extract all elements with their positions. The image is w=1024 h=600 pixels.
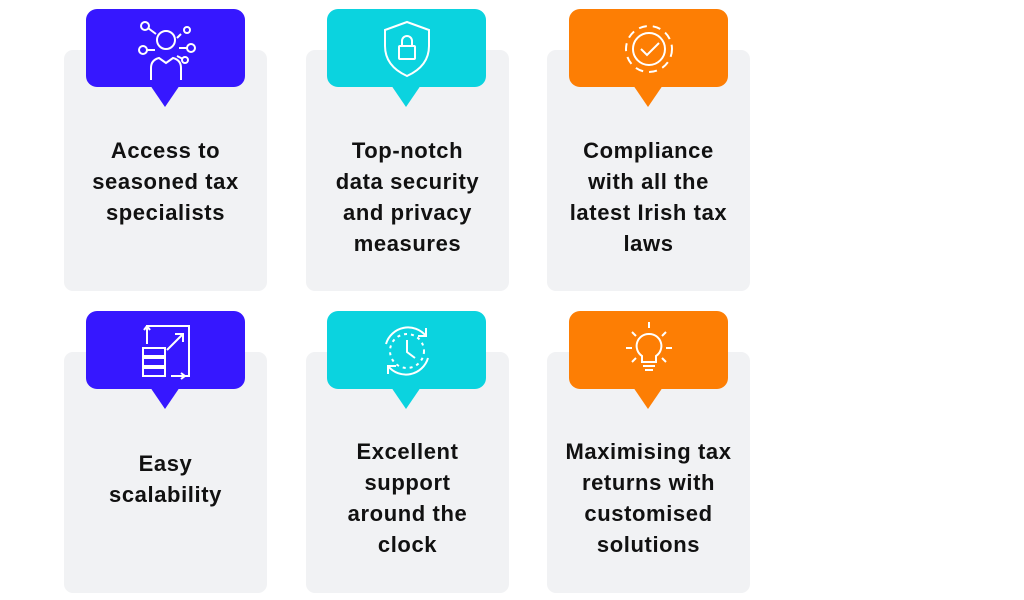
text: support: clock [378,532,437,557]
text: specialists: Access to [111,138,220,163]
text: compliance: laws [623,231,674,256]
text: maximising: returns with [582,470,715,495]
header: specialists icon [86,9,245,87]
text: support [348,439,467,557]
text: maximising: solutions [597,532,700,557]
text: support: Excellent [356,439,458,464]
text: scalability: scalability [109,482,222,507]
header: compliance icon [569,9,728,87]
text: maximising: customised [584,501,713,526]
header: security icon [327,9,486,87]
card: scalability [64,352,267,593]
text: specialists: specialists [106,200,225,225]
card: support [306,352,509,593]
card: data security [306,50,509,291]
text: compliance: latest Irish tax [570,200,727,225]
text: support: around the [348,501,467,526]
text: compliance [570,138,727,256]
card: tax specialists [64,50,267,291]
text: support: support [364,470,451,495]
text: maximising [565,439,732,557]
text: compliance: Compliance [583,138,714,163]
text: security: Top-notch [352,138,463,163]
text: maximising: Maximising tax [565,439,732,464]
header: scalability icon [86,311,245,389]
text: security: data security [336,169,479,194]
header: clock icon [327,311,486,389]
text: security: and privacy [343,200,472,225]
text: specialists [92,138,239,225]
text: compliance: with all the [588,169,709,194]
text: security: measures [354,231,461,256]
text: security [336,138,479,256]
header: idea icon [569,311,728,389]
text: scalability [109,451,222,507]
card: compliance [547,50,750,291]
text: specialists: seasoned tax [92,169,239,194]
text: scalability: Easy [139,451,192,476]
card: maximising [547,352,750,593]
